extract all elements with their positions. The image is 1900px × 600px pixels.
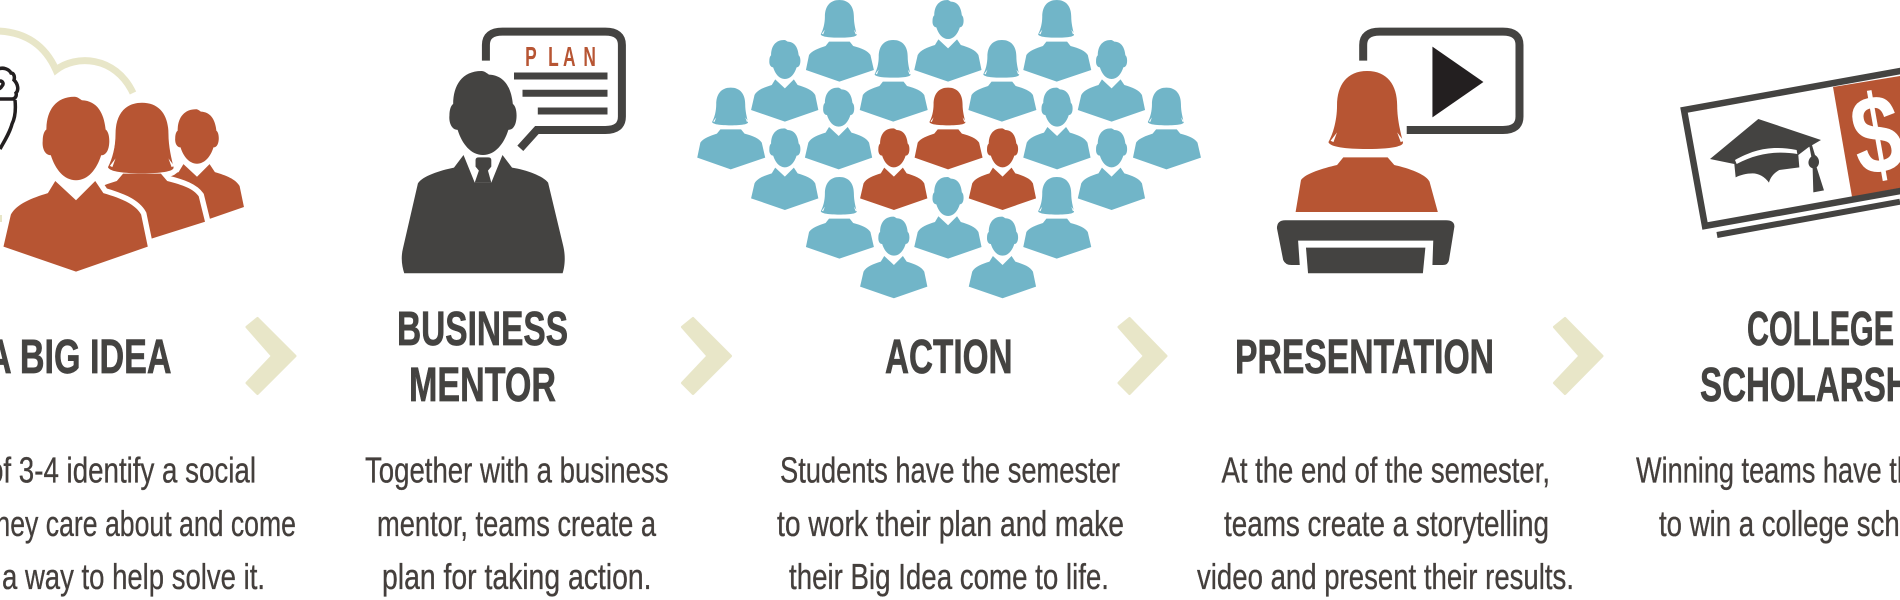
step 2 icon: mentor with plan bubble [402,32,622,273]
text: step 4 description [1197,450,1574,597]
text: step 2 description [365,450,668,597]
icon: cloud remnant [0,215,2,222]
text: step 3 description: their Big Idea come to life. [789,556,1109,597]
icon: screen frame [1363,32,1519,130]
icon: mentor suit [402,155,565,273]
icon: graduation cap [1710,119,1824,192]
text: step 4 description: At the end of the semester, [1222,450,1550,491]
icon: second bill edge [1717,202,1900,235]
icon: red dollar panel [1833,76,1900,197]
icon: idea cloud arc [0,31,133,93]
text: step 4 description: teams create a storytelling [1224,503,1549,544]
icon: lightbulb outline [0,68,18,149]
icon: mentor tie [475,157,491,183]
text: step 2 description: mentor, teams create a [377,503,657,544]
text: step 4 description: video and present their results. [1197,556,1574,597]
heading: business mentor: BUSINESS [397,303,568,356]
arrow: step 4 to 5 [1554,318,1602,394]
step 1 icon: team with big idea [0,31,244,272]
text: step 5 description [1636,450,1900,544]
text: step 2 description: Together with a business [365,450,668,491]
text: step 1 description: a way to help solve it. [2,556,265,597]
text: step 1 description [0,450,296,597]
icon: mentor head [449,71,517,155]
step 4 icon: presenter with video screen [1277,32,1519,273]
arrow: step 1 to 2 [247,318,295,394]
icon: presenter body [1296,157,1438,212]
icon: lead team member [3,97,148,272]
icon: play triangle [1432,47,1483,117]
text: step 3 description: to work their plan and make [777,503,1124,544]
heading: business mentor [397,303,568,412]
icon: third team member [150,109,244,223]
arrow: step 2 to 3 [682,318,730,394]
heading: business mentor: MENTOR [409,359,556,412]
icon: podium panel [1306,248,1425,273]
icon: presenter hair [1328,71,1404,149]
heading: college scholarship [1700,303,1900,412]
icon: second team member [81,103,205,242]
text: step 1 description: they care about and come [0,503,296,544]
icon: lead team member halo [3,97,148,272]
heading: action: ACTION [885,331,1012,384]
text: step 3 description: Students have the semester [780,450,1120,491]
icon: second team member halo [81,103,205,242]
icon: bill frame [1684,70,1900,226]
text: step 2 description: plan for taking action. [382,556,652,597]
icon: speech bubble [486,32,622,148]
text: step 3 description [777,450,1124,597]
icon: podium [1277,220,1454,265]
plan label: PLAN [525,41,596,72]
heading: presentation: PRESENTATION [1235,331,1494,384]
step 5 icon: scholarship bill [1684,69,1900,235]
step 3 icon: crowd of people [697,0,1201,298]
arrow: step 3 to 4 [1119,318,1166,394]
plan lines [514,76,608,111]
